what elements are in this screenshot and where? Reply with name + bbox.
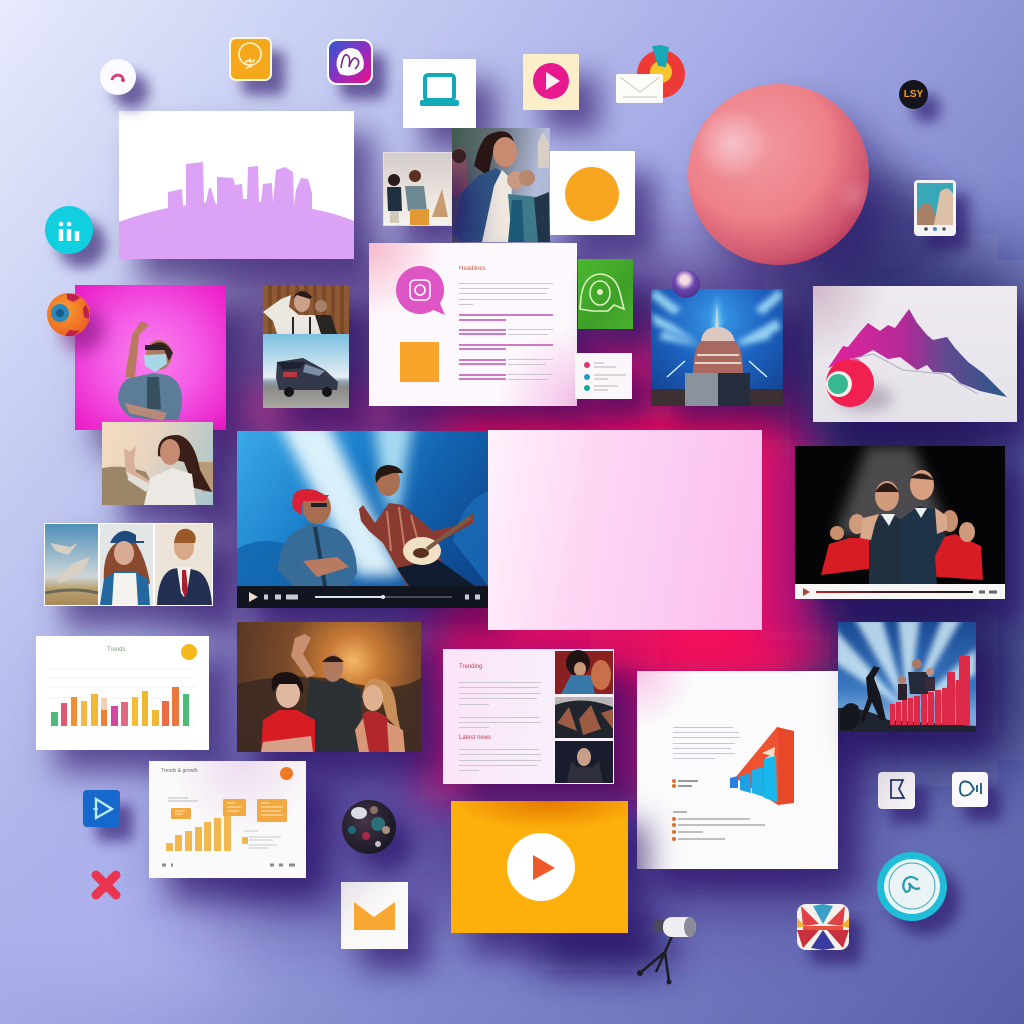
icon: purple app tile [327, 39, 373, 85]
icon: envelope with colour wheel [616, 45, 685, 103]
chart title: Trends [107, 647, 125, 653]
icon: small red arc badge [100, 59, 136, 95]
photo: masked person on magenta [75, 285, 226, 430]
photo: woman in denim [452, 128, 550, 242]
icon: orange dot [181, 644, 197, 660]
icon: colour ball left [47, 293, 90, 336]
3D bar chart icon [672, 727, 794, 841]
icon: red cross [92, 870, 120, 900]
photo: man in white shirt [263, 285, 349, 334]
second heading: Latest news [459, 735, 491, 741]
icon: pink speech bubble [396, 266, 445, 315]
panel: city skyline [119, 111, 354, 259]
photo: outdoor group [383, 152, 452, 226]
tile: mail icon [341, 882, 408, 949]
icon: play button [507, 833, 575, 901]
panel: flow chart card [149, 761, 306, 878]
icon: teal circle bars [45, 206, 93, 254]
photo: capitol dome [651, 289, 783, 406]
panel: blank pink card [488, 430, 762, 630]
header text: Trends & growth [161, 768, 198, 774]
icon: play tile [523, 54, 579, 110]
panel: bar chart card [36, 636, 209, 750]
text lines [459, 283, 553, 380]
bar chart [50, 668, 196, 726]
text lines [459, 682, 541, 771]
illustration: dark globe [342, 800, 396, 854]
photo: trio at sunset [237, 622, 421, 752]
thumbnails [555, 650, 613, 783]
panel: orange video tile [451, 801, 628, 933]
panel: report with 3D chart [637, 671, 838, 869]
icon: dark logo badge [899, 80, 928, 109]
photo: woman looking up [102, 422, 213, 505]
icon: dark logo badge: LSY [904, 89, 923, 100]
video player: musicians [237, 431, 488, 608]
icon: orange badge [280, 767, 293, 780]
panel: text with three photos [443, 649, 614, 784]
icon: teal ring clock [877, 852, 947, 921]
mini contact card [575, 353, 632, 399]
icon: orange bulb tile [229, 37, 272, 81]
icon: green emblem tile [578, 259, 633, 329]
icon: photo app tile [914, 180, 956, 236]
tile: orange circle [550, 151, 635, 235]
icon: small purple orb [672, 270, 700, 298]
orange square [400, 342, 439, 382]
text lines [673, 727, 740, 759]
heading: Trending [459, 664, 482, 670]
stepped bars and notes [162, 798, 295, 866]
panel: staged red bars photo [838, 622, 976, 732]
icon: patterned cube [797, 904, 849, 950]
icon: white link tile [952, 772, 988, 807]
video player: stage group [795, 446, 1005, 599]
photo strip: three portraits [44, 523, 213, 606]
illustration: coral sphere [688, 84, 869, 265]
icon: blue play tile [83, 790, 120, 827]
heading: Headlines [459, 266, 486, 272]
panel: mountain area chart [813, 286, 1017, 422]
icon: laptop tile [403, 59, 476, 128]
illustration: telescope [637, 917, 696, 984]
panel: article card [369, 243, 577, 406]
photo: silver car [263, 334, 349, 408]
icon: white letter tile [878, 772, 915, 809]
